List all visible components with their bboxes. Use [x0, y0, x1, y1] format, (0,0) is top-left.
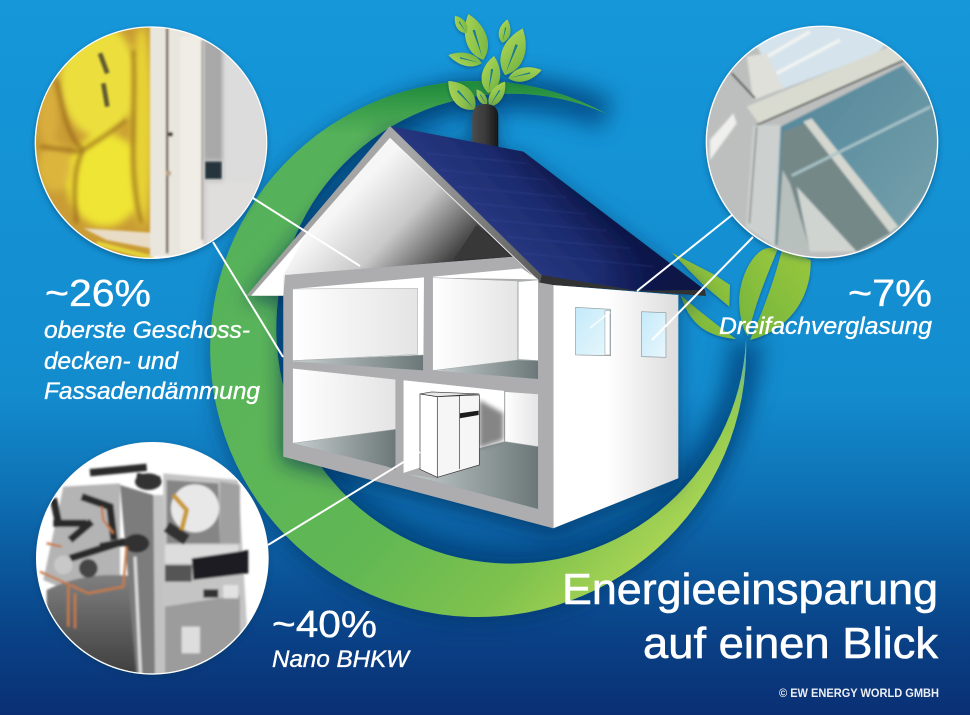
label: nano CHP: Nano BHKW [272, 646, 411, 673]
upper left room [293, 277, 424, 371]
icon: sprouting leaves above the chimney [441, 11, 543, 116]
label: roof and facade insulation [44, 273, 261, 405]
lower right room [403, 380, 538, 509]
icon: leaves on the ring at right [672, 248, 811, 340]
copyright: © EW ENERGY WORLD GMBH [779, 688, 939, 700]
attic space [252, 138, 513, 296]
cut section face [283, 257, 553, 528]
heating unit [420, 392, 503, 477]
gable frame [247, 126, 542, 296]
photo circle: nano CHP unit interior [36, 442, 269, 677]
green swoosh ring [210, 81, 746, 617]
title: Energieeinsparung [562, 565, 938, 614]
upper right room [433, 268, 538, 379]
label: nano CHP [272, 604, 411, 673]
right exterior wall [553, 285, 678, 528]
photo circle: attic insulation [33, 23, 270, 263]
label: roof and facade insulation: oberste Geschoss- [44, 317, 250, 344]
label: triple glazing [719, 273, 933, 340]
ring inner shadow [276, 94, 746, 564]
title [562, 565, 939, 668]
blue roof [390, 126, 705, 291]
window one [576, 307, 611, 356]
lower left room [293, 368, 396, 470]
house cutaway illustration [247, 104, 706, 528]
label: roof and facade insulation: decken- und [44, 348, 179, 375]
label: nano CHP: ~40% [272, 604, 377, 646]
chimney [472, 104, 498, 168]
title: auf einen Blick [643, 619, 939, 668]
photo circle: triple glazing [703, 23, 943, 263]
label: roof and facade insulation: ~26% [45, 273, 151, 315]
leader lines [213, 198, 753, 545]
eave fascia [540, 275, 706, 296]
label: roof and facade insulation: Fassadendämmung [44, 378, 261, 405]
label: triple glazing: ~7% [848, 273, 932, 315]
label: triple glazing: Dreifachverglasung [719, 313, 933, 340]
window two [642, 312, 666, 357]
